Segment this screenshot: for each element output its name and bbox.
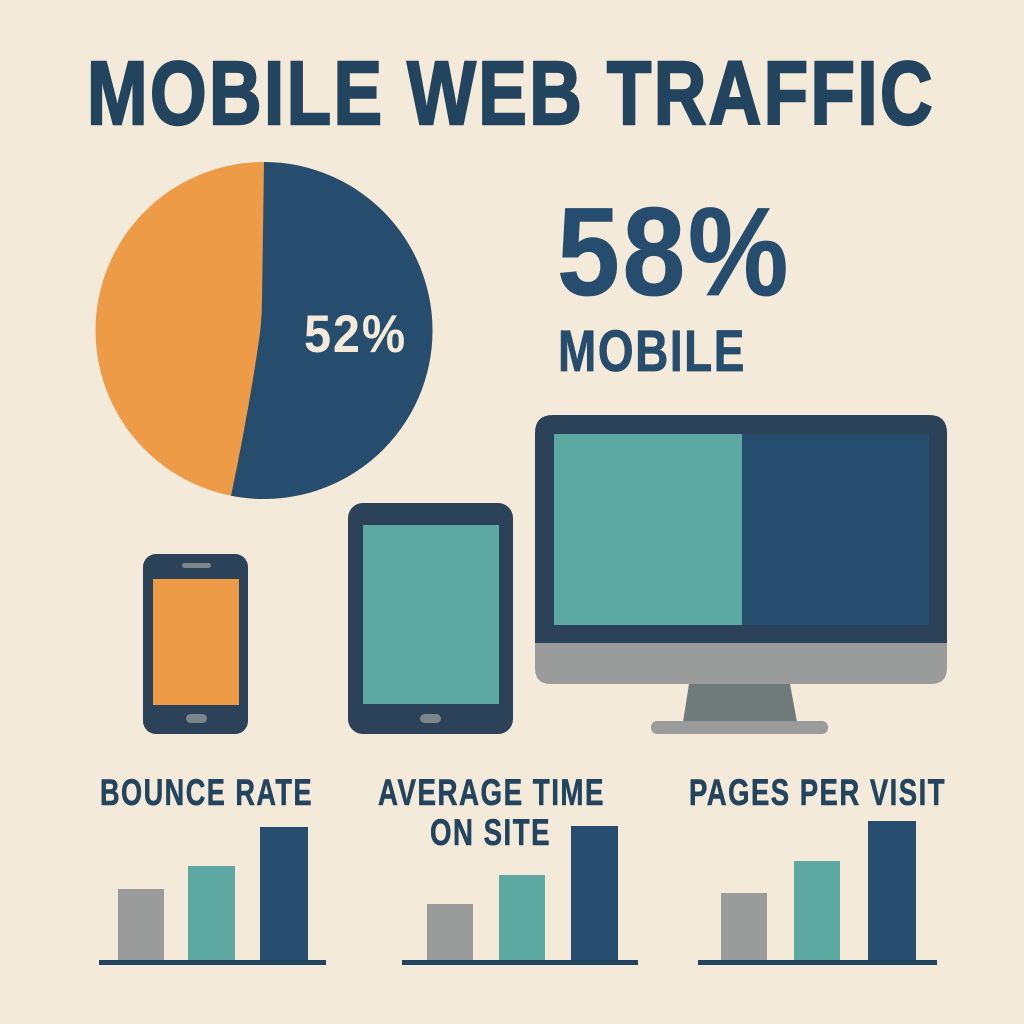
heading: average time on site: AVERAGE TIME	[378, 772, 605, 813]
bar chart: pages per visit	[698, 821, 937, 965]
heading: average time on site: ON SITE	[430, 812, 551, 853]
pie label: 52%	[304, 305, 407, 364]
stat label: mobile: MOBILE	[558, 319, 746, 384]
pie chart	[96, 162, 432, 499]
icon: tablet	[348, 503, 513, 734]
heading: average time on site	[378, 772, 605, 853]
heading: bounce rate: BOUNCE RATE	[100, 772, 313, 813]
big stat: 58%: 58%	[557, 183, 791, 322]
icon: phone	[143, 554, 248, 734]
bar chart: bounce rate	[99, 827, 326, 965]
bar chart: average time on site	[402, 826, 638, 965]
icon: desktop monitor	[535, 415, 947, 734]
